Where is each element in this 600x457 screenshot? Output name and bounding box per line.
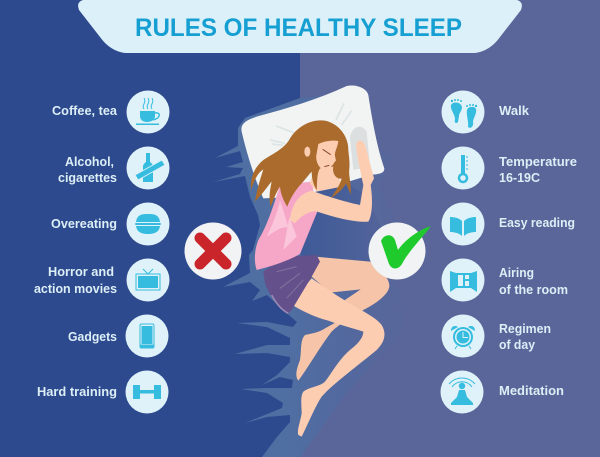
item: gadgets [68,314,168,358]
face [304,141,338,169]
item: temperature: 16-19C [499,171,540,185]
shorts [263,255,320,313]
item: alcohol, cigarettes: cigarettes [58,171,117,185]
item: alcohol, cigarettes: Alcohol, [65,155,114,169]
item: regimen of day [442,314,551,358]
icon: phone [140,324,154,348]
item: meditation [440,370,564,414]
item: alcohol, cigarettes [58,146,170,190]
item: easy reading: Easy reading [499,216,575,230]
item: temperature [442,146,577,190]
item: overeating [51,202,170,246]
eye and mouth [323,149,331,167]
item: gadgets: Gadgets [68,330,117,344]
sleeping woman [251,120,389,437]
icon: cup [136,98,159,125]
panel: left background [0,0,300,457]
item: walk [442,90,529,134]
icon: meditating figure [449,378,475,405]
item: overeating: Overeating [51,217,117,231]
item: regimen of day: Regimen [499,322,551,336]
icon: dumbbell [133,385,161,399]
front leg [290,278,384,437]
item: walk: Walk [499,104,529,118]
icon: bottle and cigarette [135,153,165,182]
item: horror and action movies: action movies [34,282,117,296]
icon: burger [135,214,161,234]
neck [310,163,342,192]
icon: tv [136,269,160,290]
item: meditation: Meditation [499,384,564,398]
item: coffee, tea [52,90,170,134]
icon: thermometer [459,155,468,182]
item: temperature: Temperature [499,155,577,169]
shaded sheet beside torso [300,185,400,267]
item: airing of the room: Airing [499,266,534,280]
shirt [255,182,317,270]
back leg [296,257,389,381]
title banner [78,0,522,53]
hair [251,120,351,207]
item: hard training: Hard training [37,385,117,399]
icon: open window [450,271,477,292]
item: horror and action movies: Horror and [48,265,114,279]
item: regimen of day: of day [499,338,535,352]
pillow [241,86,384,198]
icon: footprints [451,99,477,128]
icon: open book [450,217,476,236]
item: hard training [37,370,168,414]
item: horror and action movies [34,258,170,302]
item: easy reading [442,202,575,246]
icon: alarm clock [451,326,475,349]
bed sheet with wrinkles [213,95,411,457]
item: airing of the room: of the room [499,283,568,297]
panel: right background [300,0,600,457]
arm and hand [290,140,374,223]
item: airing of the room [442,258,568,302]
no-sign: red cross [184,222,242,280]
yes-sign: green check [368,222,431,280]
item: coffee, tea: Coffee, tea [52,104,118,118]
title: RULES OF HEALTHY SLEEP [135,14,462,42]
